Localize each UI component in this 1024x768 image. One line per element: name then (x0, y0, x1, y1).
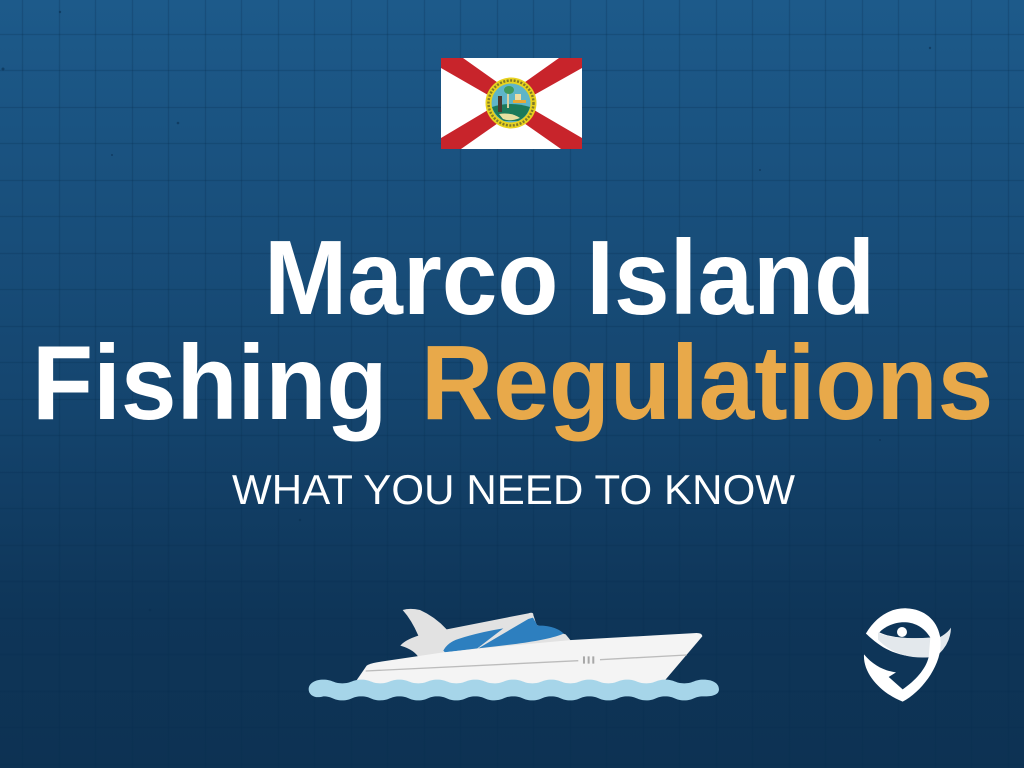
boat hull (353, 633, 702, 685)
icon: fish hook logo (862, 608, 951, 702)
logo eye socket (879, 622, 930, 638)
boat side window (443, 628, 503, 652)
title (32, 218, 993, 442)
boat windshield (478, 618, 564, 648)
title line: Fishing Regulations (32, 323, 993, 442)
boat fin and cabin (400, 609, 572, 658)
title line: Marco Island: Marco Island (264, 218, 875, 337)
title line: Fishing Regulations: Fishing (32, 323, 387, 442)
logo eye (897, 627, 907, 637)
logo body (864, 608, 941, 702)
logo band (878, 632, 930, 658)
subtitle: WHAT YOU NEED TO KNOW (232, 466, 795, 513)
logo lower cut-out (862, 634, 929, 689)
title line: Fishing Regulations: Regulations (421, 323, 993, 442)
logo tail (937, 628, 951, 654)
icon: motor yacht on waves (309, 609, 719, 700)
waves (309, 680, 719, 700)
icon: Florida state flag (441, 58, 582, 149)
